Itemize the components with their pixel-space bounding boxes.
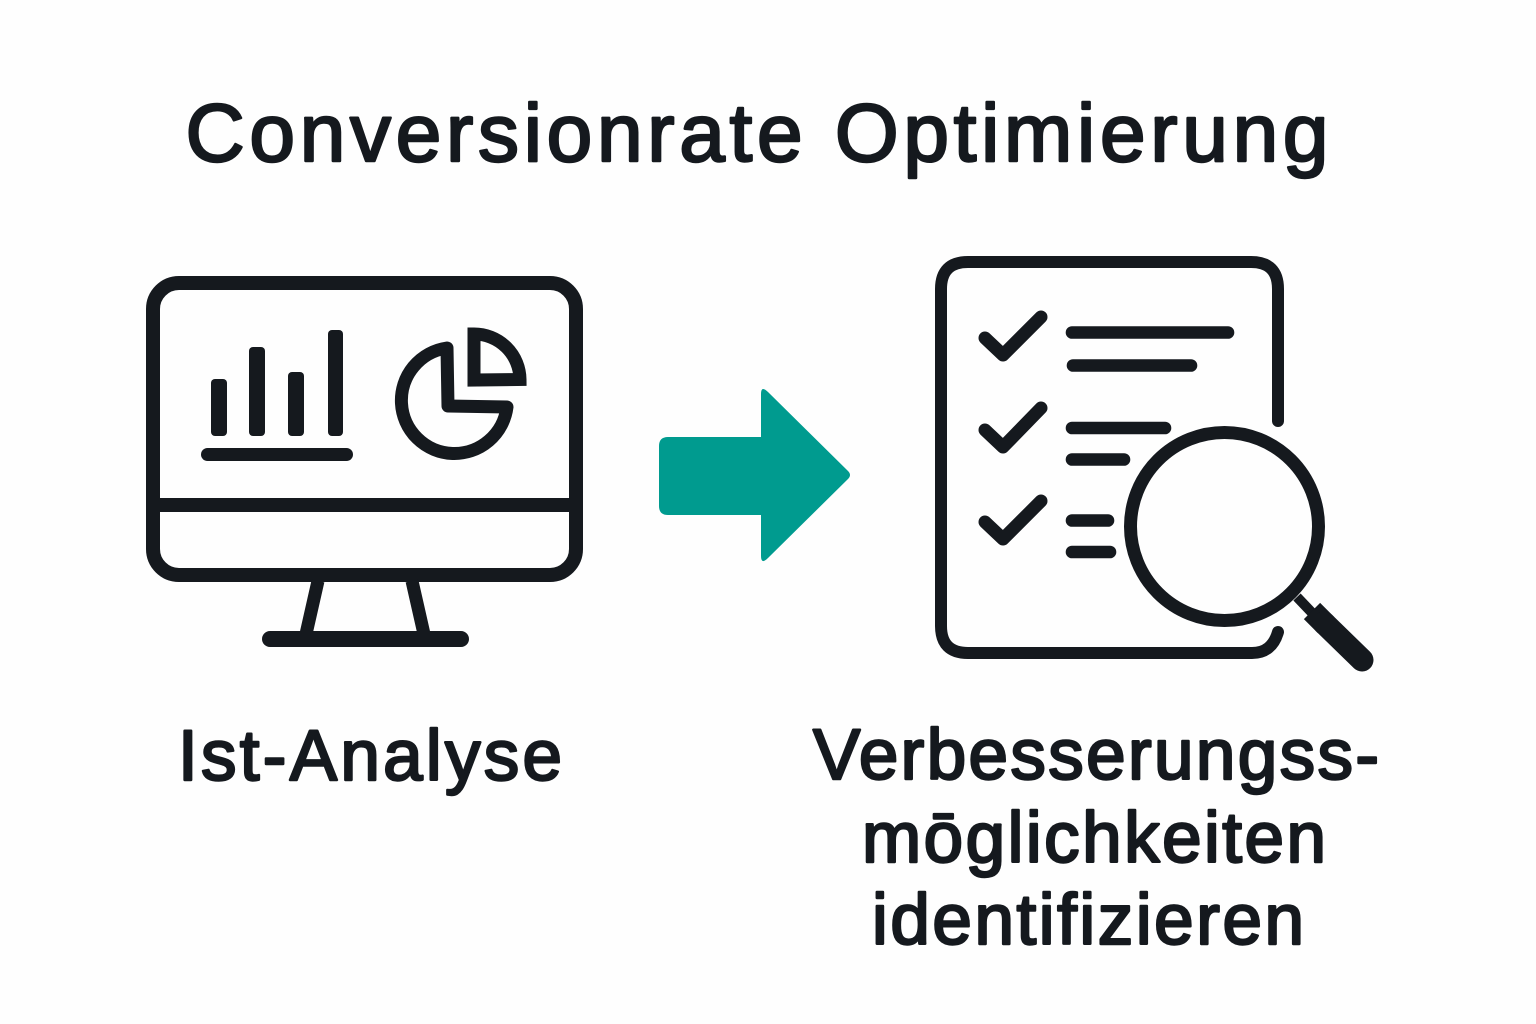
monitor screen [153,283,576,575]
label: Verbesserungsmöglichkeiten identifizieren [813,716,1379,960]
arrow [659,389,850,561]
label: Verbesserungsmöglichkeiten identifizieren: identifizieren [872,881,1304,960]
monitor divider [153,498,576,512]
label: Verbesserungsmöglichkeiten identifizieren: Verbesserungss- [813,716,1379,795]
magnifier handle [1312,611,1362,660]
pie chart [401,334,520,453]
text lines [1072,332,1228,552]
magnifier lens [1130,432,1318,620]
monitor stand [306,581,424,634]
title: Conversionrate Optimierung [186,88,1328,179]
bar chart [201,330,353,461]
magnifier neck [1297,597,1317,618]
label: Ist-Analyse: Ist-Analyse [178,717,562,796]
checkmarks [985,317,1041,539]
icon: checklist with magnifier [941,262,1362,660]
label: Verbesserungsmöglichkeiten identifizieren: mōglichkeiten [862,799,1326,878]
document outline [941,262,1278,653]
monitor base [270,631,461,647]
icon: monitor with charts [153,283,576,639]
